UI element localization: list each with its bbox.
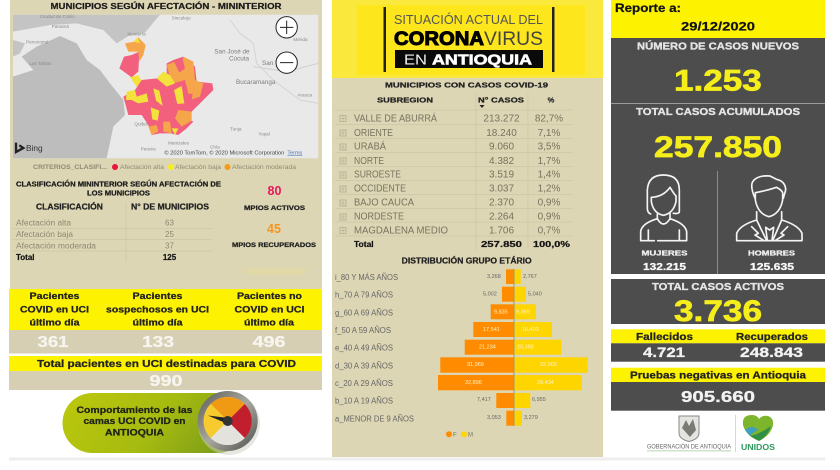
chart legend: M — [468, 432, 473, 438]
icon: gauge — [198, 391, 260, 455]
panel: fallecidos y recuperados: 4.721 — [643, 344, 685, 360]
table: casos por subregión: 0,7% — [538, 225, 561, 236]
heading: clasificación mininterior — [16, 180, 221, 198]
banner: situación actual: CORONA — [394, 29, 484, 50]
chart: pirámide por edad: e_40 A 49 AÑOS — [335, 344, 393, 353]
panel: pruebas negativas — [611, 368, 825, 411]
table: casos por subregión: 1,4% — [538, 170, 561, 181]
table: clasificación de municipios: N° DE MUNICIPIOS — [131, 202, 209, 212]
table: casos por subregión — [335, 93, 573, 250]
table: clasificación de municipios: 125 — [163, 253, 177, 262]
table: casos por subregión: 3.037 — [489, 184, 514, 195]
panel: pruebas negativas: 905.660 — [681, 389, 755, 406]
chart: pirámide por edad: 21,234 — [479, 344, 496, 350]
callout: comportamiento de las camas UCI: ANTIOQUIA — [105, 428, 165, 438]
table: casos por subregión: 3,5% — [538, 142, 561, 152]
map: municipios de Antioquia: Pereira — [141, 146, 156, 151]
map: municipios de Antioquia: Arauca — [297, 93, 312, 98]
callout: comportamiento de las camas UCI — [62, 391, 260, 455]
table: casos por subregión: ORIENTE — [354, 128, 393, 139]
chart: pirámide por edad: 3,268 — [487, 274, 501, 280]
header: fecha de reporte: Reporte a: — [615, 3, 681, 15]
panel: total casos activos — [611, 279, 825, 328]
table: casos por subregión: 1,7% — [538, 156, 561, 167]
chart: pirámide por edad: b_10 A 19 AÑOS — [335, 397, 393, 406]
table: casos por subregión: 100,0% — [533, 239, 571, 249]
stat: mujeres: 132.215 — [643, 262, 687, 273]
chart: pirámide por edad: a_MENOR DE 9 AÑOS — [335, 414, 414, 423]
panel: pacientes UCI headers: Pacientes no — [237, 291, 303, 301]
map: municipios de Antioquia: Ciudad de Colón — [40, 14, 75, 19]
chart: pirámide por edad: 9,835 — [494, 309, 508, 315]
table: casos por subregión: 4.382 — [489, 156, 514, 167]
panel: casos nuevos y acumulados — [611, 38, 825, 274]
chart: pirámide por edad: 2,767 — [523, 274, 537, 280]
banner: situación actual: SITUACIÓN ACTUAL DEL — [394, 12, 543, 27]
map: municipios de Antioquia: Terms — [287, 150, 303, 156]
table: casos por subregión: OCCIDENTE — [354, 184, 406, 195]
chart: pirámide por edad: 5,040 — [528, 292, 542, 298]
table: casos por subregión: % — [548, 96, 555, 105]
panel: total pacientes UCI COVID: Total pacientes en UCI destinadas para COVID — [37, 359, 296, 370]
chart: pirámide por edad: 9,369 — [516, 309, 530, 315]
table: casos por subregión: 9.060 — [489, 142, 514, 152]
stat: hombres: 125.635 — [750, 262, 795, 273]
map legend: CRITERIOS_CLASIFI... — [33, 165, 107, 171]
heading: distribución grupo etario: DISTRIBUCIÓN GRUPO ETÁRIO — [402, 256, 532, 265]
table: casos por subregión: 7,1% — [538, 128, 561, 139]
map legend — [33, 164, 297, 171]
header: fecha de reporte — [611, 0, 825, 38]
heading: municipios según afectación: MUNICIPIOS SEGÚN AFECTACIÓN - MININTERIOR — [50, 2, 282, 11]
chart: pirámide por edad: 20,388 — [517, 344, 534, 350]
heading: clasificación mininterior: LOS MUNICIPIOS — [87, 190, 150, 198]
table: casos por subregión: 3.519 — [489, 170, 514, 181]
table: casos por subregión: 1,2% — [538, 184, 561, 195]
table: casos por subregión: 18.240 — [486, 128, 517, 139]
chart legend: F — [453, 432, 457, 438]
chart: pirámide por edad: f_50 A 59 AÑOS — [335, 326, 391, 335]
chart: pirámide por edad: 7,417 — [477, 397, 491, 403]
table: casos por subregión: Total — [354, 239, 374, 249]
panel: total pacientes UCI COVID — [9, 356, 322, 390]
stat: hombres — [748, 249, 795, 273]
stat: municipios activos y recuperados: MPIOS RECUPERADOS — [232, 242, 317, 249]
stat: mujeres — [642, 249, 688, 273]
chart: pirámide por edad: 32,896 — [465, 380, 482, 386]
chart: pirámide por edad: 3,053 — [487, 415, 501, 421]
panel: pacientes UCI values: 496 — [252, 334, 286, 351]
panel: total pacientes UCI COVID: 990 — [150, 373, 183, 390]
chart: pirámide por edad: c_20 A 29 AÑOS — [335, 379, 393, 388]
chart: pirámide por edad: 29,434 — [537, 380, 554, 386]
panel: middle column background — [332, 78, 603, 457]
table: clasificación de municipios: Afectación alta — [16, 219, 72, 228]
stat: municipios activos y recuperados — [232, 184, 317, 275]
panel: pacientes UCI headers: COVID en UCI — [20, 304, 89, 314]
panel: pruebas negativas: Pruebas negativas en Antioquia — [630, 371, 806, 382]
banner: situación actual: VIRUS — [484, 29, 543, 50]
chart: pirámide por edad: d_30 A 39 AÑOS — [335, 361, 393, 370]
table: casos por subregión: 0,9% — [538, 198, 561, 209]
chart: pirámide por edad — [335, 269, 588, 438]
map legend: Afectación moderada — [232, 165, 297, 171]
map: municipios de Antioquia: Panamá — [52, 24, 69, 29]
table: casos por subregión: URABÁ — [354, 140, 386, 152]
map: municipios de Antioquia: Montería — [127, 32, 146, 37]
table: casos por subregión: NORTE — [354, 156, 384, 167]
panel: pacientes UCI values — [9, 330, 322, 354]
header: fecha de reporte: 29/12/2020 — [681, 20, 755, 34]
panel: casos nuevos y acumulados: 1.253 — [674, 65, 762, 98]
chart legend — [446, 431, 473, 438]
table: clasificación de municipios: CLASIFICACIÓN — [36, 201, 103, 212]
stat: mujeres: MUJERES — [642, 249, 688, 258]
panel: pacientes UCI headers: último día — [244, 318, 295, 328]
heading: municipios con casos: MUNICIPIOS CON CASOS COVID-19 — [385, 80, 548, 90]
stat: hombres: HOMBRES — [748, 249, 795, 258]
table: clasificación de municipios: 63 — [165, 219, 174, 228]
map: municipios de Antioquia: Quibdó — [134, 121, 150, 126]
map: municipios de Antioquia: San José de — [214, 48, 250, 55]
chart: pirámide por edad: 6,955 — [532, 397, 546, 403]
map: municipios de Antioquia: Mérida — [293, 37, 308, 42]
panel: pacientes UCI headers: sospechosos en UCI — [106, 304, 209, 314]
map: municipios de Antioquia: Manizales — [168, 140, 190, 145]
panel: casos nuevos y acumulados: TOTAL CASOS ACUMULADOS — [636, 106, 800, 118]
heading: clasificación mininterior: CLASIFICACIÓN MININTERIOR SEGÚN AFECTACIÓN DE — [16, 180, 221, 188]
stat: municipios activos y recuperados: 45 — [267, 222, 281, 236]
banner: situación actual — [332, 0, 603, 78]
icon: mujer — [641, 175, 687, 241]
table: casos por subregión: NORDESTE — [354, 212, 404, 223]
callout: comportamiento de las camas UCI: camas UCI COVID en — [84, 416, 186, 426]
table: casos por subregión: 2.264 — [489, 212, 514, 223]
table: casos por subregión: N° CASOS — [478, 96, 524, 105]
table: clasificación de municipios — [13, 201, 212, 262]
map: municipios de Antioquia: Yopal — [258, 131, 270, 136]
table: casos por subregión: 82,7% — [535, 114, 563, 125]
banner: situación actual: EN — [404, 52, 427, 68]
panel: total casos activos: 3.736 — [674, 295, 762, 328]
table: casos por subregión: VALLE DE ABURRÁ — [354, 112, 437, 125]
logo: Unidos: UNIDOS — [741, 443, 776, 452]
panel: casos nuevos y acumulados: 257.850 — [654, 131, 782, 164]
table: clasificación de municipios: Afectación baja — [16, 230, 74, 239]
panel: pacientes UCI headers: Pacientes — [30, 291, 80, 301]
panel: total casos activos: TOTAL CASOS ACTIVOS — [652, 281, 784, 293]
panel: fallecidos y recuperados: Recuperados — [736, 332, 808, 343]
panel: pacientes UCI headers: COVID en UCI — [234, 304, 304, 314]
map: municipios de Antioquia: © 2020 TomTom, © 2020 Microsoft Corporation — [164, 149, 284, 156]
icon: hombre — [737, 176, 802, 241]
map: municipios de Antioquia: Sincelejo — [172, 15, 191, 20]
panel: fallecidos y recuperados: Fallecidos — [636, 332, 694, 343]
table: casos por subregión: MAGDALENA MEDIO — [354, 225, 448, 236]
table: casos por subregión: 0,9% — [538, 212, 561, 223]
map: municipios de Antioquia: San — [262, 60, 274, 67]
table: casos por subregión: 213.272 — [483, 114, 520, 125]
map: municipios de Antioquia: Chía — [210, 144, 220, 149]
table: casos por subregión: 2.370 — [489, 198, 514, 209]
stat: municipios activos y recuperados: MPIOS ACTIVOS — [244, 205, 306, 212]
logo: Gobernación de Antioquia — [647, 416, 731, 451]
table: clasificación de municipios: Afectación moderada — [16, 242, 97, 251]
panel: pacientes UCI headers: Pacientes — [132, 291, 182, 301]
map: municipios de Antioquia: Tunja — [230, 126, 242, 131]
panel: fallecidos y recuperados — [611, 329, 825, 362]
panel: casos nuevos y acumulados: NÚMERO DE CASOS NUEVOS — [637, 40, 799, 52]
panel: left column background — [10, 0, 322, 289]
chart: pirámide por edad: 16,403 — [522, 327, 539, 333]
table: clasificación de municipios: 37 — [165, 242, 174, 251]
chart: pirámide por edad: 31,969 — [467, 362, 484, 368]
logo: Gobernación de Antioquia: GOBERNACIÓN DE ANTIOQUIA — [647, 444, 731, 451]
panel: pacientes UCI headers: último día — [30, 318, 81, 328]
stat: municipios activos y recuperados: 80 — [268, 184, 281, 198]
table: casos por subregión: 257.850 — [481, 239, 522, 249]
panel: fallecidos y recuperados: 248.843 — [740, 344, 803, 360]
chart: pirámide por edad: 3,279 — [524, 415, 538, 421]
map: municipios de Antioquia: Cúcuta — [229, 56, 250, 63]
chart: pirámide por edad: g_60 A 69 AÑOS — [335, 308, 393, 317]
map legend: Afectación baja — [175, 165, 222, 171]
table: casos por subregión: SUBREGION — [377, 96, 433, 105]
bottom strip — [9, 458, 825, 460]
logo: Unidos — [741, 415, 776, 452]
map legend: Afectación alta — [120, 165, 165, 171]
chart: pirámide por edad: 5,002 — [483, 292, 497, 298]
panel: pacientes UCI values: 361 — [38, 334, 69, 351]
table: clasificación de municipios: Total — [16, 253, 35, 262]
chart: pirámide por edad: 32,000 — [540, 362, 557, 368]
table: casos por subregión: BAJO CAUCA — [354, 198, 414, 209]
table: casos por subregión: SUROESTE — [354, 170, 401, 181]
panel: pacientes UCI headers: último día — [132, 318, 184, 328]
table: clasificación de municipios: 25 — [165, 230, 174, 239]
table: casos por subregión: 1.706 — [489, 225, 514, 236]
chart: pirámide por edad: i_80 Y MÁS AÑOS — [335, 273, 398, 282]
callout: comportamiento de las camas UCI: Comportamiento de las — [76, 405, 193, 415]
map: municipios de Antioquia: Bucaramanga — [236, 79, 276, 86]
panel: pacientes UCI values: 133 — [142, 334, 174, 351]
map: municipios de Antioquia: Penonomé — [26, 39, 49, 44]
banner: situación actual: ANTIOQUIA — [432, 52, 532, 68]
chart: pirámide por edad: h_70 A 79 AÑOS — [335, 291, 393, 300]
chart: pirámide por edad: 17,541 — [483, 327, 500, 333]
panel: pacientes UCI headers — [9, 289, 322, 330]
map: municipios de Antioquia — [13, 14, 318, 158]
map: municipios de Antioquia: Bing — [26, 143, 43, 153]
map: municipios de Antioquia: Las Tablas — [29, 61, 52, 66]
